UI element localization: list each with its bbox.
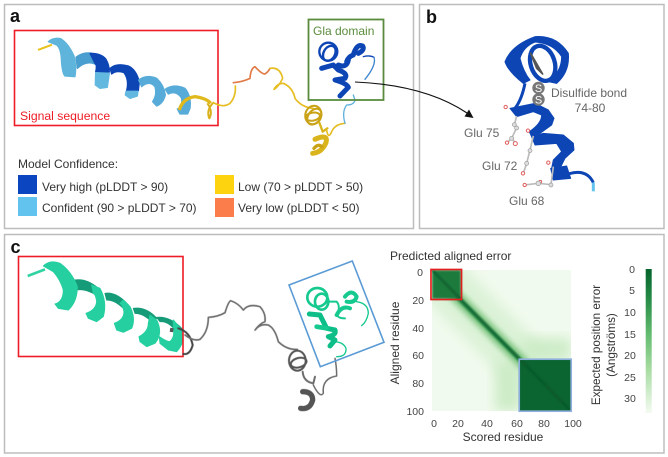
legend: model confidence (18, 157, 363, 217)
disulfide label: Disulfide bond (551, 86, 627, 100)
panel: c (4, 234, 664, 453)
label Glu 75: Glu 75 (464, 126, 500, 140)
label Glu 68: Glu 68 (509, 194, 545, 208)
y axis ticks: 60 (412, 350, 424, 362)
heatmap title: Predicted aligned error (390, 249, 511, 263)
disulfide helix ribbon (505, 37, 593, 191)
x axis ticks: 40 (481, 418, 493, 430)
colour bar title: Expected position error (590, 285, 603, 405)
panel letter b: b (426, 7, 437, 27)
blue residue box (519, 359, 571, 411)
legend item confident: Confident (90 > pLDDT > 70) (42, 201, 197, 215)
x axis ticks: 80 (538, 418, 550, 430)
legend item very low (215, 198, 360, 217)
signal sequence helix (38, 38, 213, 118)
x axis ticks: 100 (564, 418, 582, 430)
legend item low: Low (70 > pLDDT > 50) (238, 180, 363, 194)
colour bar: 5 (629, 285, 635, 297)
colour bar title: (Angströms) (605, 313, 618, 377)
signal sequence box: Signal sequence (20, 109, 110, 123)
Gla domain box (308, 20, 384, 100)
y axis ticks: 100 (406, 406, 424, 418)
signal sequence box (14, 30, 218, 126)
y axis ticks: 0 (417, 267, 423, 279)
signal helix teal (28, 262, 183, 352)
predicted aligned error heatmap (430, 268, 572, 412)
arrow from Gla domain to panel b (355, 82, 474, 118)
panel letter c: c (10, 237, 21, 257)
x axis ticks (431, 418, 582, 430)
x axis ticks: 20 (452, 418, 464, 430)
Gla domain teal ribbon (307, 288, 368, 357)
colour bar: 10 (624, 307, 636, 319)
red residue box (431, 270, 462, 300)
glutamate side chains (504, 105, 553, 187)
signal sequence box c (18, 256, 183, 356)
panel letter a: a (10, 6, 21, 26)
legend item very high: Very high (pLDDT > 90) (42, 180, 168, 194)
Gla domain box: Gla domain (313, 24, 374, 38)
disulfide bond: S (535, 94, 542, 106)
legend: model confidence: Model Confidence: (18, 157, 118, 171)
disulfide bond (532, 82, 545, 106)
x axis ticks: 60 (511, 418, 523, 430)
panel: b (420, 4, 664, 228)
legend item low (215, 175, 363, 194)
y axis ticks: 20 (412, 295, 424, 307)
colour bar: 25 (624, 372, 636, 384)
colour bar: 0 (629, 264, 635, 276)
colour bar title (590, 285, 618, 405)
panel: a (4, 4, 414, 228)
colour bar (624, 264, 652, 413)
disulfide bond: S (535, 83, 542, 95)
colour bar: 15 (624, 329, 636, 341)
y axis ticks: 80 (412, 378, 424, 390)
disulfide label: 74-80 (575, 101, 606, 115)
grey linker ribbon (178, 301, 337, 409)
y axis ticks: 40 (412, 323, 424, 335)
legend item very low: Very low (pLDDT < 50) (238, 201, 360, 215)
x axis title: Scored residue (463, 430, 544, 444)
colour bar: 30 (624, 393, 636, 405)
disulfide label (551, 86, 627, 115)
y axis title: Aligned residue (388, 301, 402, 384)
legend item confident (18, 197, 197, 216)
legend item very high (18, 175, 168, 194)
x axis ticks: 0 (431, 418, 437, 430)
disordered linker and Gla domain ribbon (213, 43, 374, 153)
y axis ticks (406, 267, 424, 418)
colour bar: 20 (624, 350, 636, 362)
Gla domain rotated box (289, 261, 384, 367)
label Glu 72: Glu 72 (482, 159, 518, 173)
